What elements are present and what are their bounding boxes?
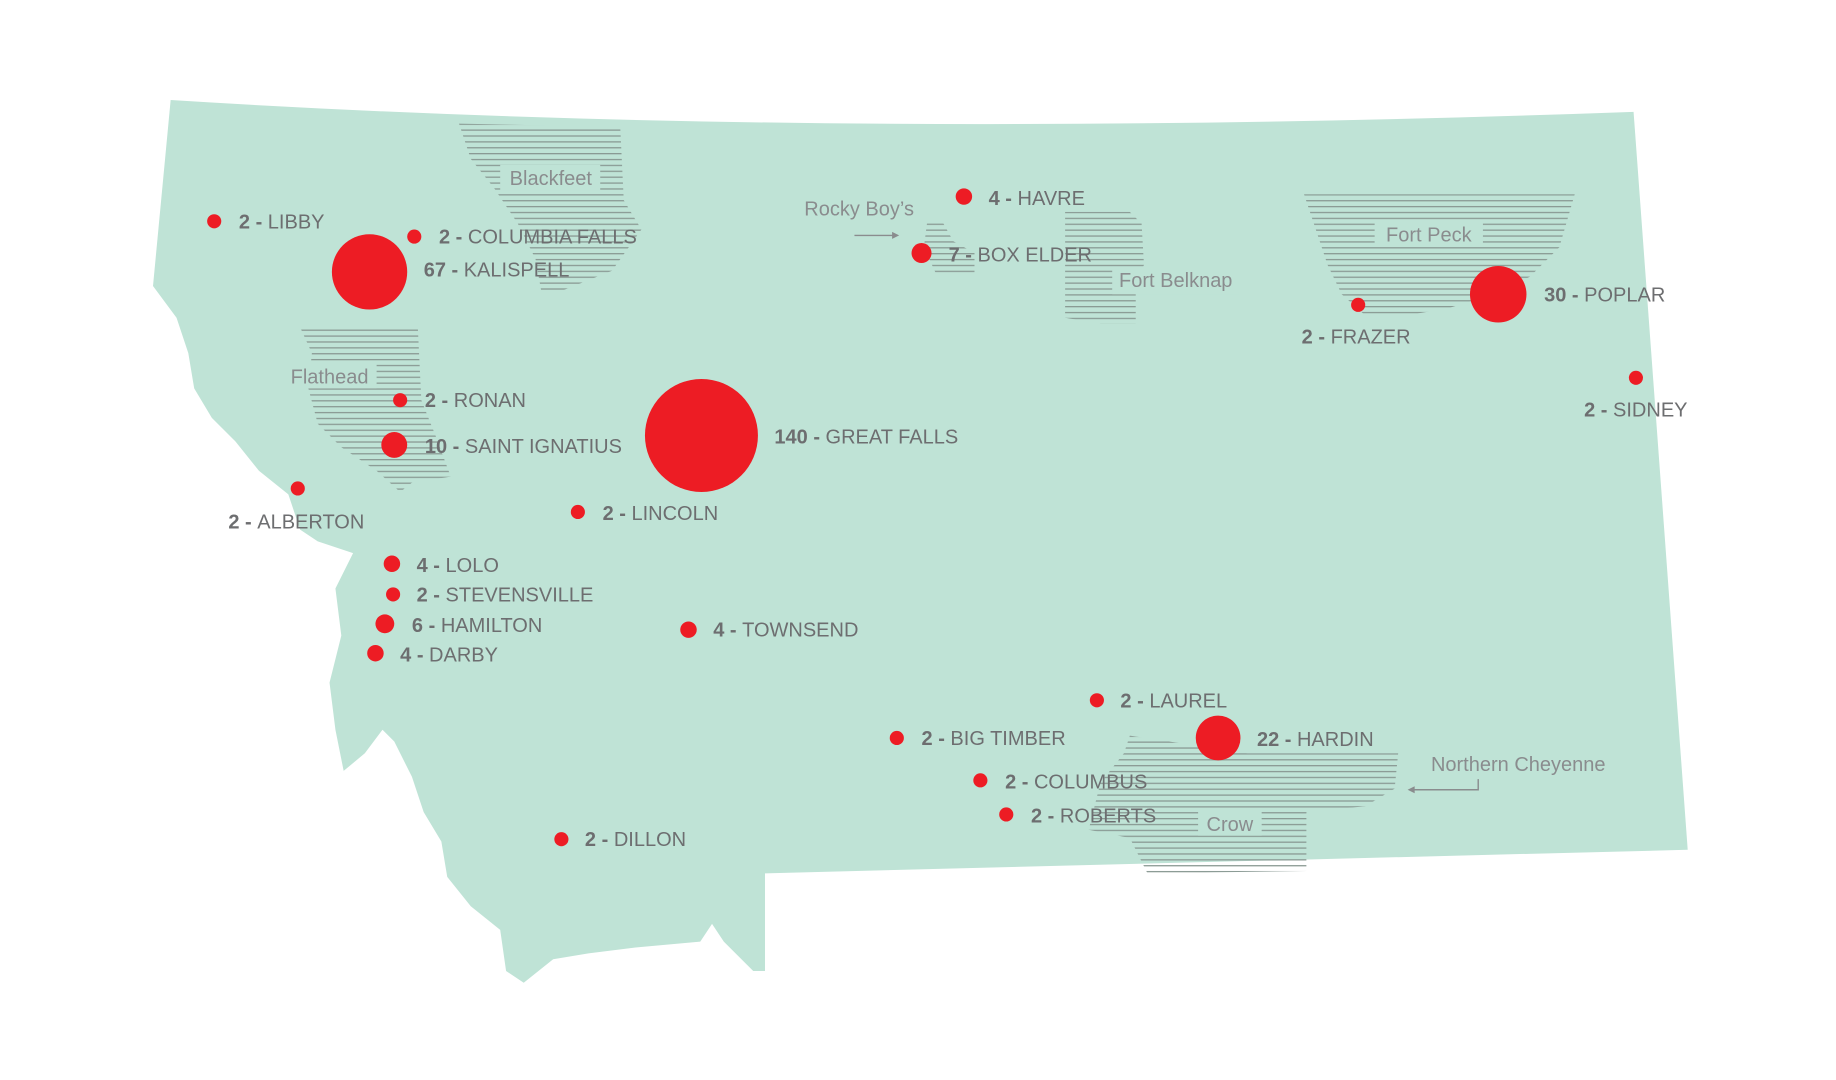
city labels [228,188,1688,851]
reservation: Crow: Crow [1207,814,1254,836]
reservation: Blackfeet: Blackfeet [510,168,592,190]
city labels: 4 - HAVRE [989,188,1085,210]
city labels: 2 - BIG TIMBER [922,728,1066,750]
city labels: 2 - LAUREL [1120,690,1227,712]
city labels: 10 - SAINT IGNATIUS [425,436,622,458]
city labels: 4 - LOLO [417,555,499,577]
reservation: Flathead: Flathead [291,367,368,389]
city labels: 4 - TOWNSEND [713,620,858,642]
city labels: 67 - KALISPELL [424,260,569,282]
reservation: Rocky Boy's [804,198,974,273]
city markers [207,188,1643,846]
reservation: Fort Belknap: Fort Belknap [1119,270,1232,292]
city labels: 2 - COLUMBUS [1005,772,1147,794]
city labels: 2 - COLUMBIA FALLS [439,227,637,249]
city labels: 30 - POPLAR [1544,284,1665,306]
city labels: 7 - BOX ELDER [949,244,1092,266]
reservation: Fort Belknap [1065,212,1239,324]
city labels: 140 - GREAT FALLS [774,427,958,449]
city labels: 22 - HARDIN [1257,729,1374,751]
reservation: Northern Cheyenne label: Northern Cheyenne [1431,754,1606,776]
city labels: 2 - FRAZER [1302,327,1411,349]
city labels: 6 - HAMILTON [412,615,542,637]
map: Montana outline [153,100,1688,983]
city labels: 2 - LIBBY [239,211,325,233]
city labels: 4 - DARBY [400,644,498,666]
reservation: Northern Cheyenne label [1408,754,1606,793]
city labels: 2 - ALBERTON [228,511,364,533]
city labels: 2 - STEVENSVILLE [417,584,593,606]
city labels: 2 - SIDNEY [1584,400,1688,422]
reservation: Fort Peck: Fort Peck [1386,224,1473,246]
reservation: Flathead [282,327,451,492]
reservation: Blackfeet [459,124,641,292]
reservation: Fort Peck [1304,194,1575,315]
city labels: 2 - LINCOLN [603,503,718,525]
city labels: 2 - RONAN [425,390,526,412]
city labels: 2 - DILLON [585,829,686,851]
reservation: Rocky Boy's: Rocky Boy’s [804,198,914,220]
reservation: Crow [1089,736,1398,873]
city labels: 2 - ROBERTS [1031,806,1156,828]
